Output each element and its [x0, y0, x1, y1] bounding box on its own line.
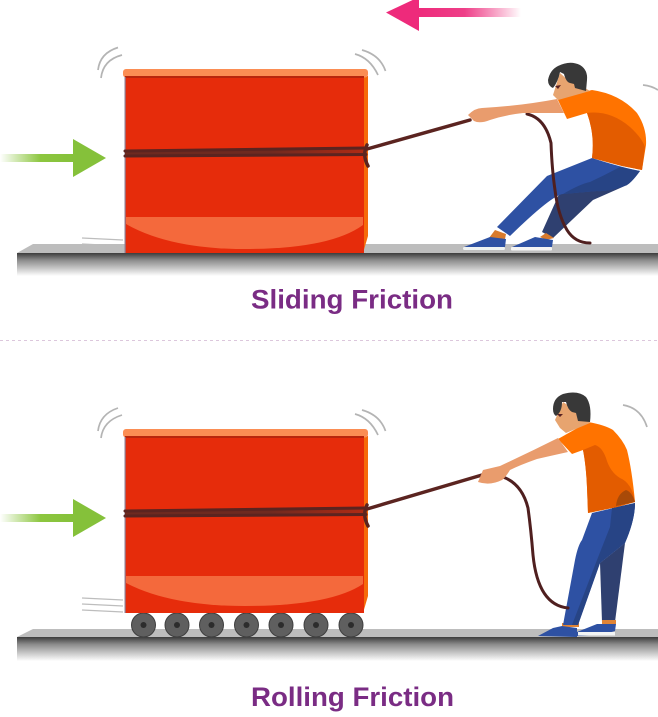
- head: [555, 402, 590, 433]
- person: sliding: [463, 63, 646, 251]
- motion lines: rolling: [82, 598, 123, 612]
- socks: [562, 623, 579, 627]
- ground: rolling: [17, 629, 658, 661]
- rope on crate: sliding: [125, 120, 470, 166]
- shirt: [557, 90, 646, 170]
- front leg: [563, 503, 635, 625]
- shoes: [463, 237, 553, 250]
- arm: [468, 99, 564, 122]
- shoes: [538, 624, 616, 637]
- arrow: applied force (green): [0, 499, 106, 537]
- back leg: [542, 175, 627, 238]
- vibration marks: sliding: [98, 48, 658, 90]
- person: rolling: [478, 393, 635, 637]
- rope on crate: rolling: [125, 475, 482, 526]
- arrow: friction force (pink): [386, 0, 521, 31]
- crate: rolling: [123, 429, 368, 613]
- vibration marks: rolling: [98, 405, 647, 438]
- front leg: [497, 158, 640, 236]
- ground: sliding: [17, 244, 658, 276]
- rope loop: [527, 114, 590, 243]
- arm: [478, 438, 568, 484]
- motion lines: sliding: [82, 238, 123, 251]
- panel: sliding friction: [0, 48, 658, 276]
- heading: rolling friction: Rolling Friction: [251, 682, 454, 712]
- leg shadow: [563, 167, 640, 194]
- wheels: [132, 613, 363, 637]
- shirt: [558, 422, 635, 513]
- crate: sliding: [123, 69, 368, 253]
- socks: [489, 230, 506, 239]
- head: [553, 73, 590, 100]
- rope loop: [503, 477, 568, 608]
- back leg: [600, 543, 625, 622]
- heading: sliding friction: Sliding Friction: [251, 284, 453, 314]
- arrow: applied force (green): [0, 139, 106, 177]
- panel: rolling friction: [0, 393, 658, 661]
- divider: [0, 340, 658, 342]
